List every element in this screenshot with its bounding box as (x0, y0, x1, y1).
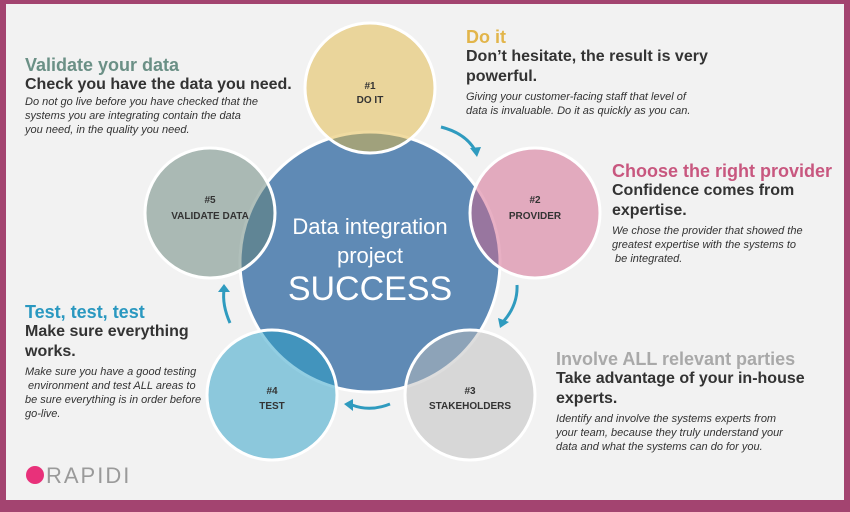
circle #2: #2 (529, 195, 541, 206)
text: involve: Involve ALL relevant parties (556, 349, 795, 369)
text: test: Test, test, test (25, 302, 145, 322)
text: do it: Do it (466, 27, 506, 47)
circle #2 (470, 148, 600, 278)
circle #4: TEST (259, 401, 285, 412)
text: provider: We chose the provider that showed the (612, 225, 803, 237)
text: provider: greatest expertise with the systems to (612, 239, 796, 251)
text: involve: your team, because they truly understand your (556, 427, 783, 439)
text: test: Make sure you have a good testing (25, 366, 196, 378)
text: test: environment and test ALL areas to (28, 380, 196, 392)
text: provider: expertise. (612, 202, 687, 219)
text: test: go-live. (25, 408, 60, 420)
circle #1: DO IT (357, 95, 383, 106)
circle #3 (405, 330, 535, 460)
circle #5: #5 (204, 195, 216, 206)
text: do it (466, 27, 708, 117)
text: test: Make sure everything (25, 323, 189, 340)
text: involve: experts. (556, 390, 617, 407)
text: do it: powerful. (466, 68, 537, 85)
text: do it: Giving your customer-facing staff that level of (466, 91, 686, 103)
central circle: Data integration (292, 214, 448, 239)
circle #5 (145, 148, 275, 278)
text: provider: be integrated. (615, 253, 682, 265)
text: involve: Identify and involve the systems experts from (556, 413, 776, 425)
logo: RAPIDI (46, 463, 131, 488)
text: validate: Do not go live before you have checked that the (25, 96, 258, 108)
arrows (224, 127, 517, 408)
text: validate: you need, in the quality you need. (25, 124, 190, 136)
text: validate (24, 55, 292, 136)
circle #4: #4 (266, 386, 278, 397)
central circle (240, 132, 500, 392)
text: test: be sure everything is in order before (25, 394, 201, 406)
text: provider: Confidence comes from (612, 182, 794, 199)
text: provider (612, 161, 832, 265)
circle #3: #3 (464, 386, 476, 397)
central circle: project (337, 243, 403, 268)
text: do it: Don’t hesitate, the result is very (466, 48, 708, 65)
circle #1: #1 (364, 81, 376, 92)
text: validate: systems you are integrating contain the data (25, 110, 241, 122)
text: involve (555, 349, 805, 453)
circle #1 (305, 23, 435, 153)
circle #2: PROVIDER (509, 211, 562, 222)
text: do it: data is invaluable. Do it as quickly as you can. (466, 105, 690, 117)
text: involve: Take advantage of your in-house (556, 370, 805, 387)
text: test (25, 302, 201, 420)
text: involve: data and what the systems can do for you. (556, 441, 763, 453)
circle #4 (207, 330, 337, 460)
text: validate: Check you have the data you need. (25, 76, 292, 93)
text: validate: Validate your data (25, 55, 179, 75)
central circle: SUCCESS (288, 270, 452, 308)
text: test: works. (25, 343, 76, 360)
circle #5: VALIDATE DATA (171, 211, 249, 222)
text: provider: Choose the right provider (612, 161, 832, 181)
circle #3: STAKEHOLDERS (429, 401, 511, 412)
